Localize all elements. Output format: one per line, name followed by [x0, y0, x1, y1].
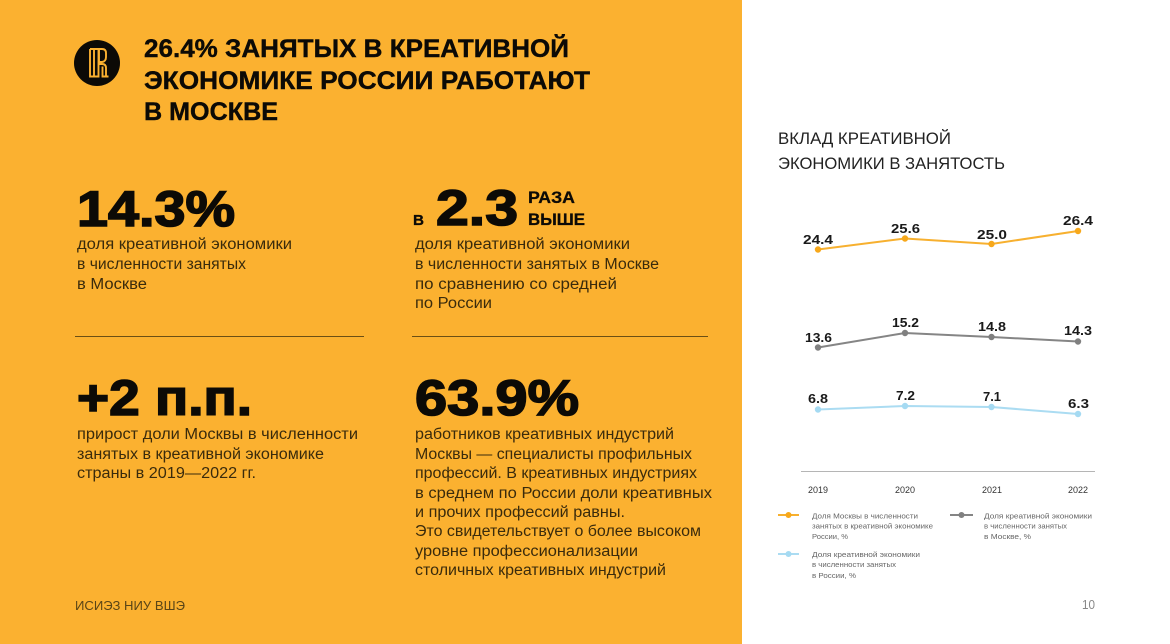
- stat: 63.9%: и прочих профессий равны.: [415, 504, 625, 521]
- stat: +2 percentage points: страны в 2019—2022 гг.: [77, 465, 256, 482]
- chart heading: ЭКОНОМИКИ В ЗАНЯТОСТЬ: [778, 154, 1005, 173]
- series: Moscow share of creative employment: 25.0: [977, 227, 1007, 242]
- stat: 2.3 times higher: в численности занятых в Москве: [415, 256, 659, 273]
- stat: 63.9%: профессий. В креативных индустриях: [415, 465, 697, 482]
- legend item: orange: Доля Москвы в численности: [812, 512, 918, 520]
- legend item: orange: занятых в креативной экономике: [812, 522, 933, 530]
- stat: +2 percentage points: +2 п.п.: [77, 370, 252, 426]
- title: ЭКОНОМИКЕ РОССИИ РАБОТАЮТ: [144, 67, 590, 95]
- x axis: 2021: [982, 485, 1002, 495]
- panel: orange background: [0, 0, 742, 644]
- legend item: blue: [778, 550, 920, 580]
- legend item: grey: Доля креативной экономики: [984, 512, 1092, 520]
- footer: organisation: ИСИЭЗ НИУ ВШЭ: [75, 598, 185, 613]
- stat: 2.3 times higher: доля креативной экономики: [415, 236, 630, 253]
- series: Moscow share of creative employment: 24.4: [803, 232, 834, 247]
- legend item: blue: Доля креативной экономики: [812, 550, 920, 559]
- series: Moscow share of creative employment: [803, 213, 1094, 253]
- stat: +2 percentage points: [77, 370, 358, 482]
- x axis: 2022: [1068, 485, 1088, 495]
- legend item: blue: в численности занятых: [812, 560, 896, 569]
- series: creative economy share in Moscow: 15.2: [892, 315, 919, 330]
- legend item: grey: в Москве, %: [984, 532, 1031, 541]
- series: creative economy share in Moscow: 13.6: [805, 330, 832, 345]
- stat: 2.3 times higher: 2.3: [436, 180, 518, 236]
- page number: 10: [1082, 597, 1095, 612]
- stat: 63.9%: в среднем по России доли креативных: [415, 485, 712, 502]
- legend item: grey: [950, 512, 1092, 541]
- stat: 63.9%: [415, 370, 712, 579]
- stat: 14.3%: в Москве: [77, 276, 147, 293]
- icon: HSE logo: [74, 40, 120, 86]
- series: creative economy share in Russia: 6.8: [808, 391, 828, 406]
- title: 26.4% ЗАНЯТЫХ В КРЕАТИВНОЙ: [144, 33, 569, 63]
- legend item: blue: в России, %: [812, 571, 856, 580]
- series: creative economy share in Moscow: 14.3: [1064, 323, 1092, 338]
- title: В МОСКВЕ: [144, 98, 278, 126]
- series: creative economy share in Russia: 6.3: [1068, 396, 1089, 411]
- series: creative economy share in Russia: [808, 388, 1089, 417]
- stat: 63.9%: столичных креативных индустрий: [415, 562, 666, 579]
- stat: 63.9%: 63.9%: [415, 370, 579, 426]
- series: Moscow share of creative employment: 25.6: [891, 221, 920, 236]
- stat: 2.3 times higher: ВЫШЕ: [528, 211, 585, 229]
- stat: 14.3%: [77, 181, 292, 293]
- stat: 2.3 times higher: РАЗА: [528, 189, 575, 207]
- stat: 63.9%: Москвы — специалисты профильных: [415, 446, 692, 463]
- title: [144, 33, 590, 126]
- stat: +2 percentage points: прирост доли Москвы в численности: [77, 426, 358, 443]
- chart heading: ВКЛАД КРЕАТИВНОЙ: [778, 129, 951, 148]
- series: creative economy share in Russia: 7.2: [896, 388, 915, 403]
- stat: 2.3 times higher: по России: [415, 295, 492, 312]
- series: Moscow share of creative employment: 26.4: [1063, 213, 1094, 228]
- stat: 63.9%: уровне профессионализации: [415, 543, 638, 560]
- stat: 63.9%: Это свидетельствует о более высоком: [415, 523, 701, 540]
- stat: +2 percentage points: занятых в креативной экономике: [77, 446, 324, 463]
- line chart: [801, 213, 1095, 495]
- chart heading: [778, 129, 1005, 173]
- x axis: 2019: [808, 485, 828, 495]
- legend item: orange: России, %: [812, 532, 848, 541]
- stat: 14.3%: 14.3%: [77, 181, 235, 237]
- legend item: orange: [778, 512, 933, 541]
- series: creative economy share in Moscow: 14.8: [978, 319, 1006, 334]
- stat: 63.9%: работников креативных индустрий: [415, 426, 674, 443]
- legend item: grey: в численности занятых: [984, 522, 1067, 530]
- series: creative economy share in Moscow: [805, 315, 1092, 351]
- stat: 2.3 times higher: В: [413, 212, 424, 229]
- series: creative economy share in Russia: 7.1: [983, 389, 1001, 404]
- x axis: [801, 472, 1095, 495]
- stat: 14.3%: в численности занятых: [77, 256, 246, 273]
- stat: 2.3 times higher: [413, 180, 659, 312]
- x axis: 2020: [895, 485, 915, 495]
- stat: 2.3 times higher: по сравнению со средней: [415, 276, 617, 293]
- stat: 14.3%: доля креативной экономики: [77, 236, 292, 253]
- legend: [778, 512, 1092, 580]
